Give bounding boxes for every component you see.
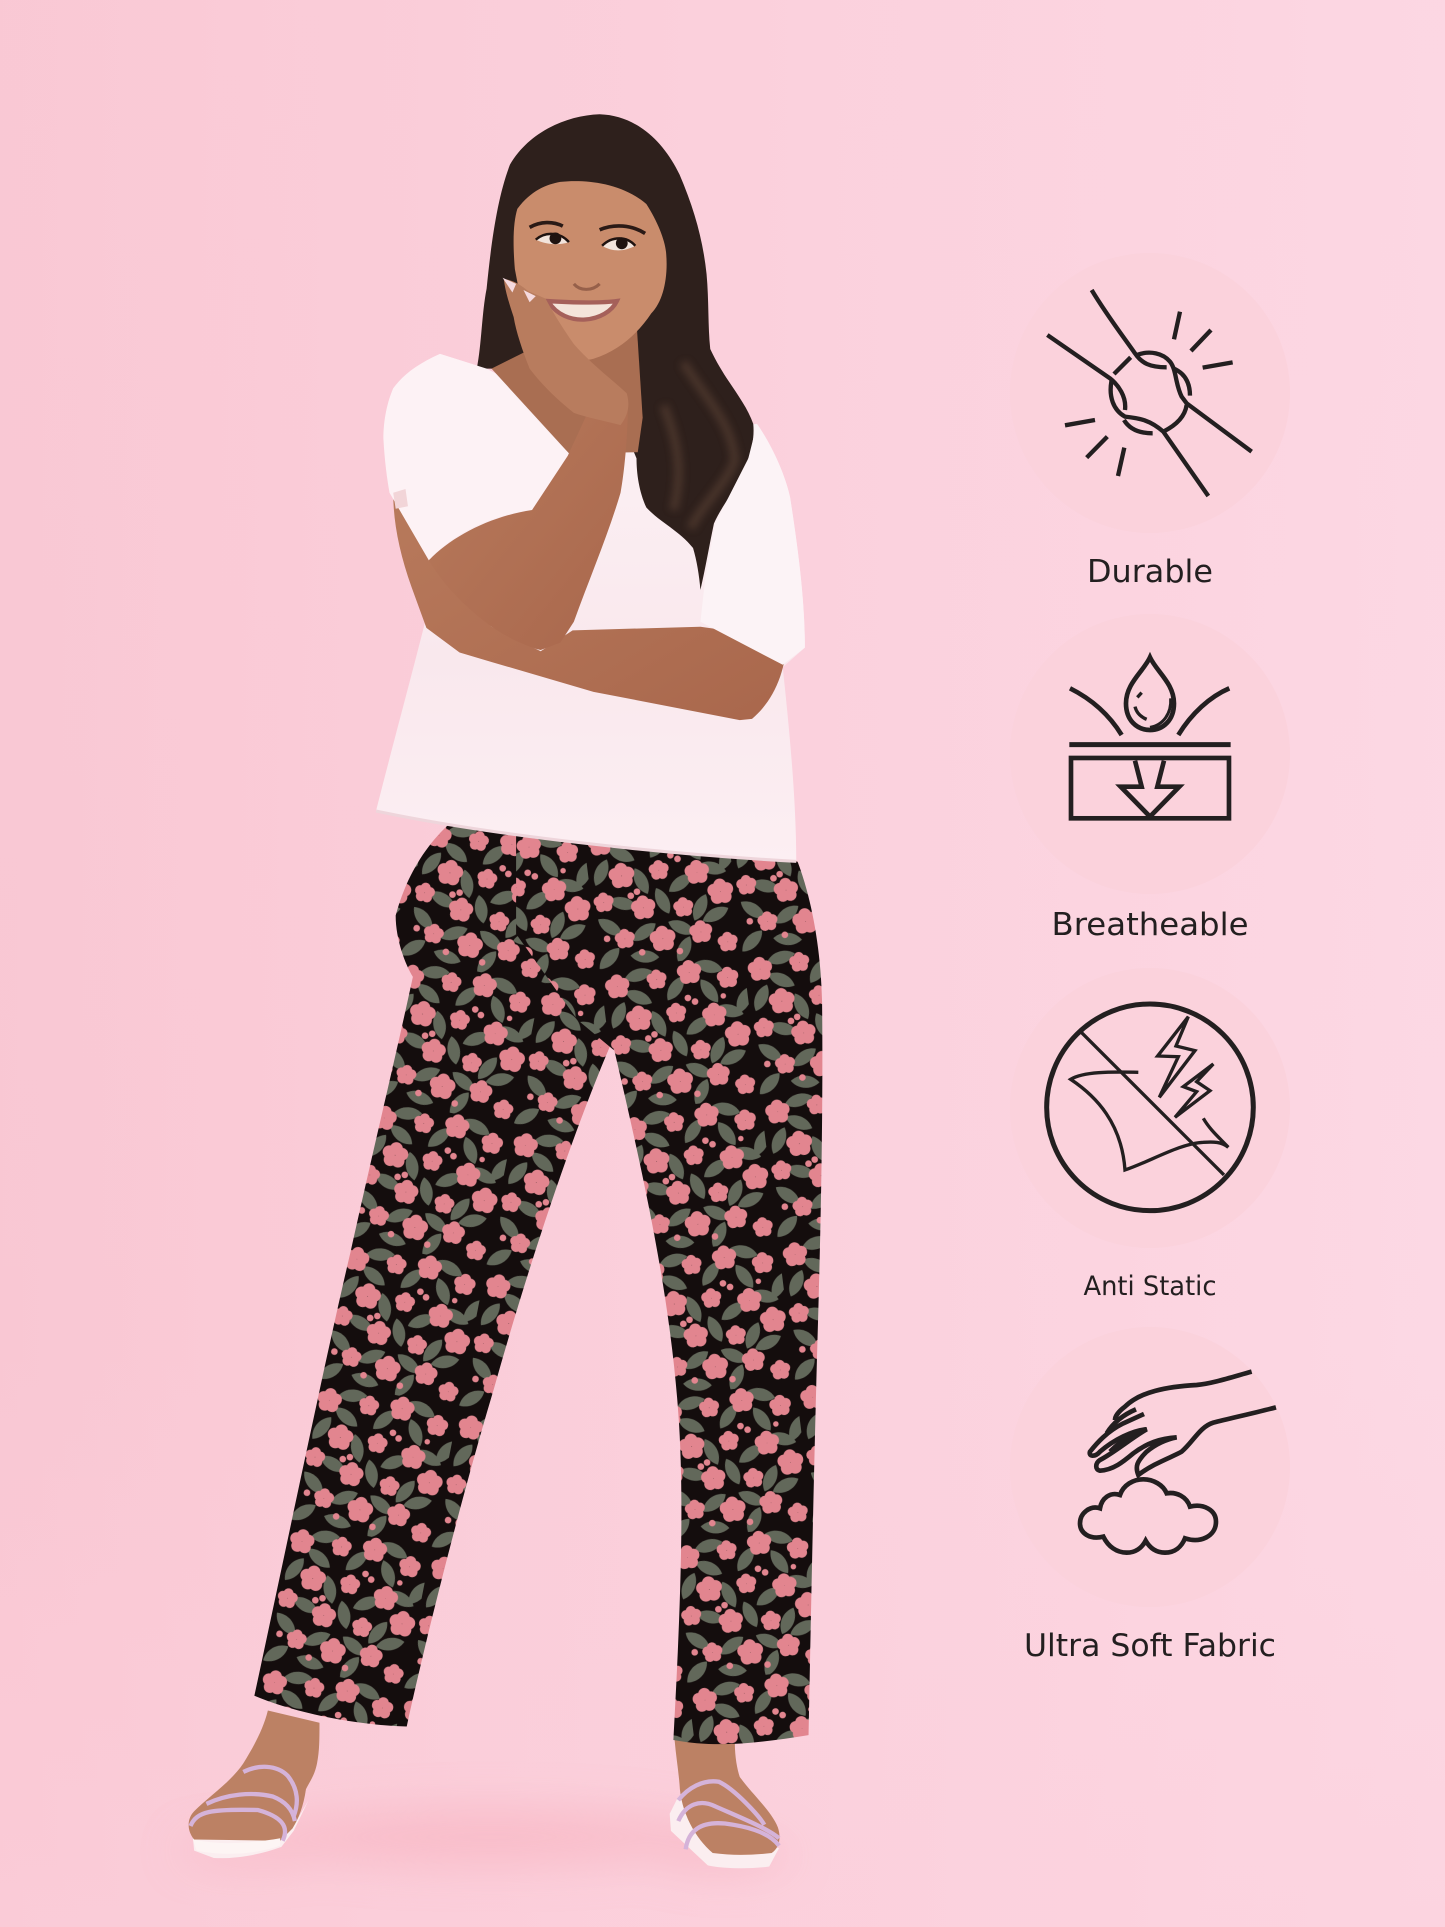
left foot and sandal — [189, 1710, 319, 1858]
feature: Breatheable — [1010, 614, 1290, 943]
left foot — [189, 1710, 319, 1841]
floor shadow — [178, 1810, 793, 1870]
face — [514, 181, 667, 360]
t-shirt: hem line — [376, 811, 796, 861]
left sole — [193, 1800, 308, 1858]
pants: right leg — [516, 833, 822, 1744]
raised arm — [429, 403, 628, 650]
feature: Anti Static — [1010, 968, 1290, 1302]
right sleeve — [700, 424, 805, 665]
right sole — [670, 1797, 779, 1868]
durable circle — [1010, 253, 1290, 533]
feature: Durable — [1010, 253, 1290, 590]
eyebrows — [530, 223, 645, 233]
label: Breatheable: Breatheable — [1052, 907, 1248, 943]
fingernails — [503, 278, 536, 302]
ultra soft circle — [1010, 1327, 1290, 1607]
right foot — [675, 1740, 780, 1855]
breatheable circle — [1010, 614, 1290, 894]
right straps — [678, 1781, 779, 1849]
label: Ultra Soft Fabric: Ultra Soft Fabric — [1024, 1628, 1276, 1664]
icon: durable knot — [1047, 290, 1252, 496]
model figure — [178, 114, 822, 1870]
left sleeve — [383, 354, 569, 560]
gripping fingertips — [393, 489, 408, 509]
hair — [477, 114, 754, 590]
left straps — [190, 1767, 297, 1841]
t-shirt — [376, 354, 805, 861]
floral pants — [254, 826, 822, 1744]
pants: left leg — [254, 826, 639, 1726]
eyes — [536, 232, 635, 250]
hand on cheek — [503, 278, 628, 425]
folded arm — [393, 489, 786, 720]
icon: water drop on fabric — [1069, 657, 1231, 818]
smile — [548, 301, 617, 320]
icon: hand over cloud — [1080, 1372, 1276, 1553]
label: Durable: Durable — [1087, 554, 1213, 590]
anti static circle — [1010, 968, 1290, 1248]
icon: no static — [1047, 1004, 1253, 1211]
neck and chest — [492, 322, 643, 453]
label: Anti Static: Anti Static — [1084, 1271, 1216, 1302]
feature: Ultra Soft Fabric — [1010, 1327, 1290, 1664]
right foot and sandal — [670, 1740, 780, 1868]
hair highlights — [664, 362, 735, 528]
nose shadow — [574, 284, 600, 289]
